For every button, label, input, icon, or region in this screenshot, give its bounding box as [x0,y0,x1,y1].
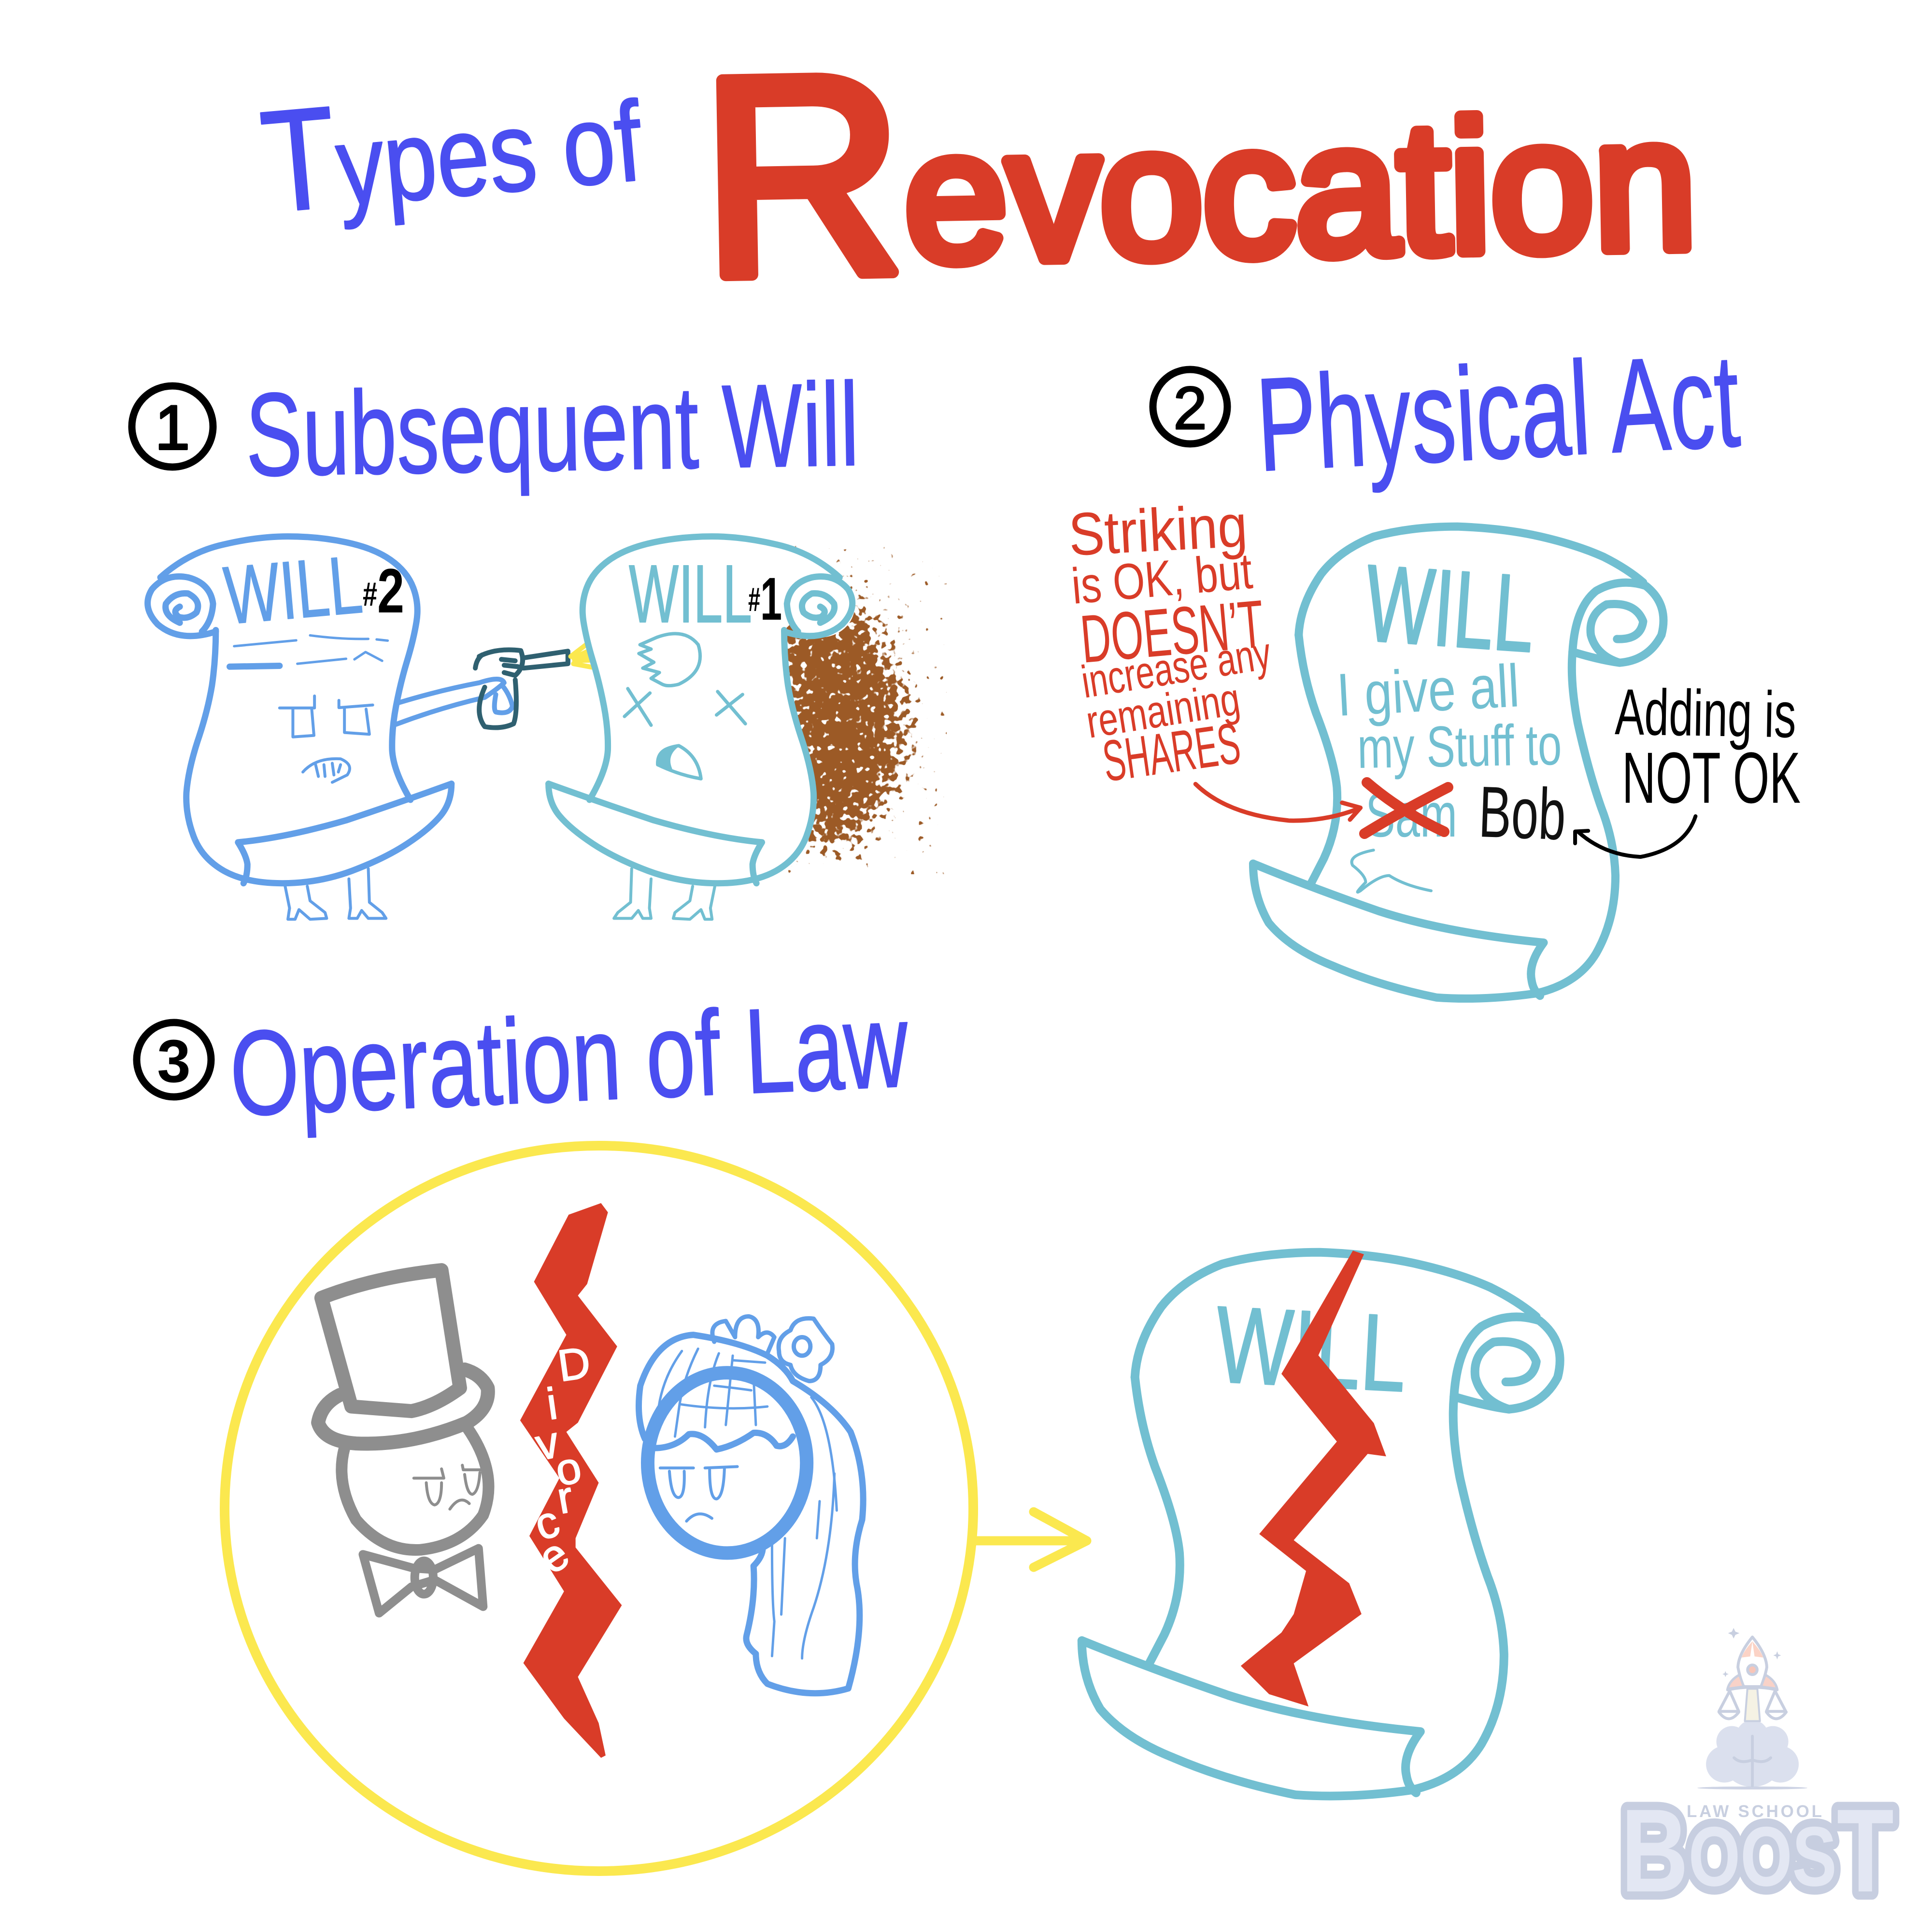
will text: I give all: I give all [1335,652,1521,729]
logo word: boost: T [1837,1784,1894,1917]
heading text 3: Operation of Law [227,977,911,1141]
signature [1352,850,1431,892]
number tag #2: 2 [377,555,404,626]
arm [396,679,512,724]
number badge 1: 1 [155,392,190,463]
callout: striking: increase any [1078,627,1275,708]
logo: Law School Boost [1621,1628,1894,1917]
lightning divorce bolt [520,1203,622,1758]
stars [1722,1628,1781,1677]
panel: subsequent will illustration [148,537,908,919]
title [255,2,1699,335]
scroll body fill [549,537,854,883]
face outline [648,1373,807,1553]
veil outline [639,1335,863,1693]
crown and flower [712,1316,832,1381]
title: Types of: Types of [255,49,647,243]
face features [660,1466,738,1521]
will #1 character [549,537,854,919]
veil and hair detail [659,1349,837,1659]
muzzle flash [571,638,624,671]
rocket, scales and brain icon [1697,1628,1807,1790]
arrow: divorce to will [973,1512,1087,1567]
callout: striking: SHARES [1099,710,1244,794]
number tag #1: 1 [760,566,782,633]
number badge 2: 2 [1173,375,1207,442]
will 2 label: WILL [221,539,366,642]
will #2 character [148,537,452,919]
logo word: boost: OOS [1689,1810,1837,1904]
title: Revocation: R [698,16,908,335]
heading 2: Physical Act [1153,326,1743,500]
panel: physical act illustration [1067,492,1801,998]
callout: striking: Striking [1067,492,1249,568]
face [414,1465,482,1509]
callout: striking [1067,492,1275,794]
bow tie [363,1548,483,1613]
will label torn: WILL [1212,1283,1409,1415]
divorce label: Divorce [529,1338,594,1583]
scribbled text lines [230,635,388,667]
callout: striking: DOESN’T [1078,585,1267,677]
scales [1719,1687,1786,1719]
red strike X [1364,782,1448,834]
red crack [1241,1250,1386,1706]
heading 1: Subsequent Will [132,358,860,501]
title: Revocation: evocation [903,79,1698,301]
scroll outline will 2 [148,537,452,883]
added name: Bob: Bob [1477,771,1567,855]
head [341,1427,488,1550]
callout: adding [1614,675,1801,818]
scroll outline torn will [1082,1252,1560,1796]
hair wave [654,1433,793,1449]
callout: striking: remaining [1083,673,1243,748]
will text: my Stuff to: my Stuff to [1357,712,1562,781]
heading text 1: Subsequent Will [244,358,860,501]
number badge 2 [1153,369,1227,444]
top hat [318,1270,488,1444]
callout: striking: is OK, but [1069,543,1255,615]
struck name: Sam: Sam [1365,780,1457,850]
arrow: striking to Sam [1195,784,1361,821]
arrow: adding to Bob [1575,816,1695,857]
callout: adding: Adding is [1614,675,1797,752]
brain cloud [1706,1720,1799,1787]
legs will 2 [285,868,386,919]
groom [318,1270,488,1613]
heading 3: Operation of Law [137,977,911,1141]
number badge 3 [137,1023,211,1097]
bride [639,1316,863,1693]
scroll outline will 1 [549,537,852,919]
bullet hole and dead face [625,634,745,779]
panel: torn will [1082,1250,1560,1796]
callout: adding: NOT OK [1622,737,1801,818]
logo word: boost: B [1621,1784,1706,1917]
number tag #2: # [363,575,377,613]
yellow circle [225,1146,973,1871]
number badge 3: 3 [157,1028,191,1095]
scroll outline physical act [1253,526,1663,998]
panel: operation of law, divorce circle [225,1146,973,1871]
number badge 1 [132,386,213,467]
eyes and mouth will 2 [280,696,373,782]
will label: WILL [1362,541,1538,675]
gun [475,650,568,728]
logo label: law school: LAW SCHOOL [1687,1802,1822,1821]
arm and gun [396,650,568,728]
number tag #1: # [748,581,760,618]
rocket [1738,1637,1767,1687]
will 1 label: WILL [629,548,752,640]
blood splatter [773,604,908,855]
